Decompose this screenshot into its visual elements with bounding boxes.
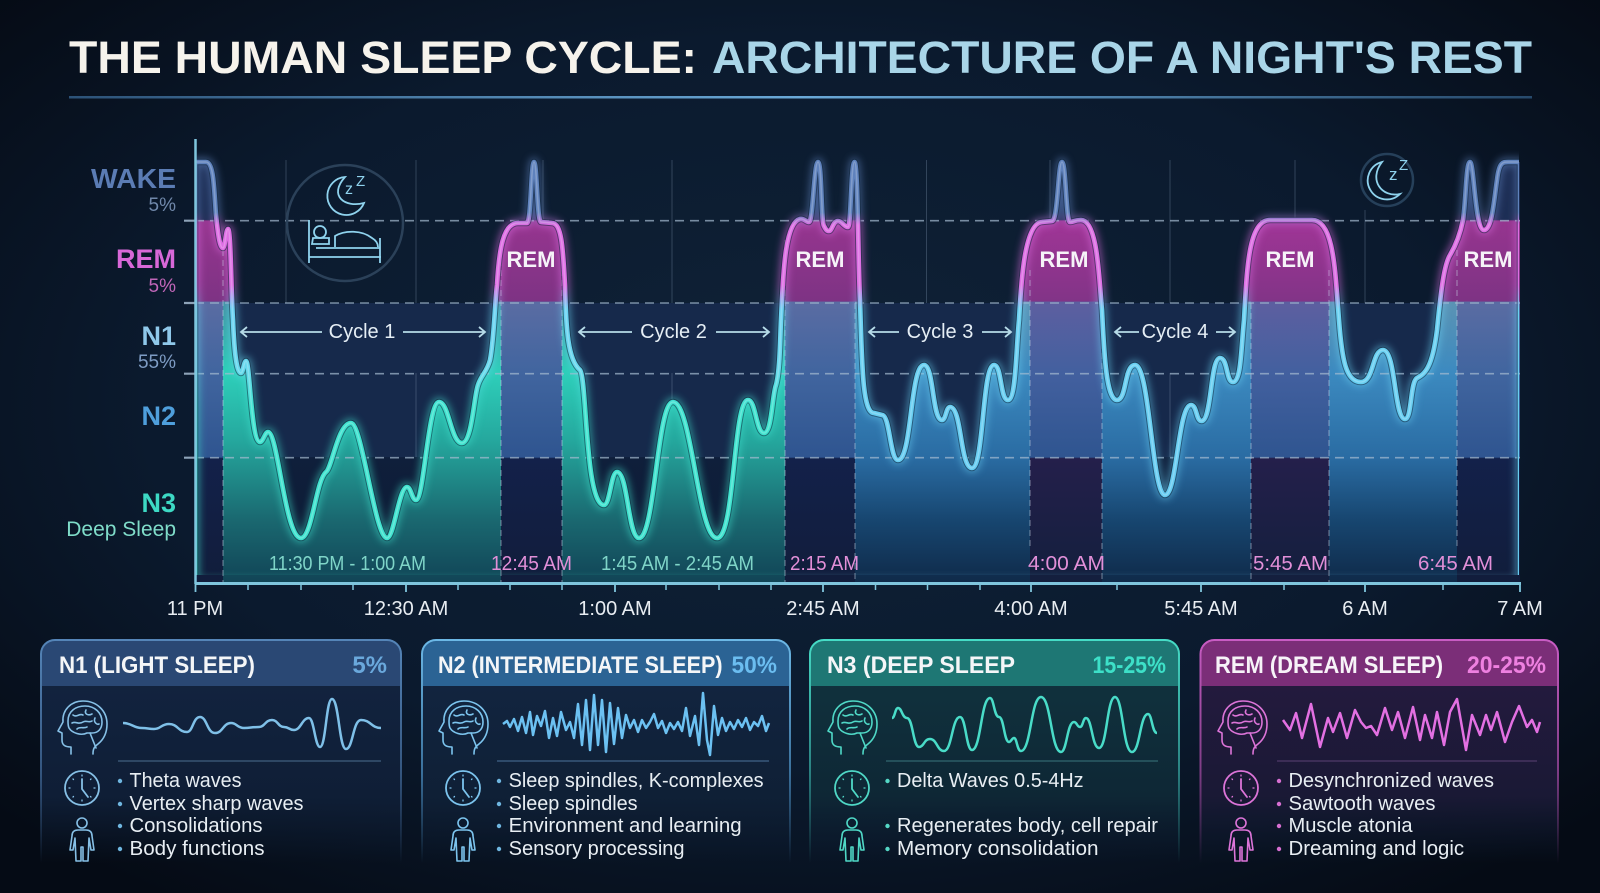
- REM labels inside chart: REM: [1266, 247, 1314, 272]
- panel: N1 light sleep: N1 (LIGHT SLEEP): [59, 652, 255, 679]
- icon: small moon: Z: [1399, 157, 1408, 174]
- title: [69, 32, 1532, 83]
- y-axis stage labels: WAKE: [91, 163, 176, 194]
- y-axis stage labels: REM: [116, 244, 176, 274]
- x-axis time labels: 5:45 AM: [1164, 598, 1238, 620]
- panel: N2 intermediate sleep: Environment and learning: [509, 815, 742, 837]
- cycle brackets: Cycle 2: [640, 321, 707, 343]
- cycle brackets: Cycle 3: [907, 321, 973, 343]
- panel: N2 intermediate sleep: N2 (INTERMEDIATE SLEEP): [438, 652, 722, 679]
- x-axis time labels: 6 AM: [1342, 598, 1388, 620]
- chart fill: under-curve sleep stage areas: [195, 150, 1520, 583]
- panel: N1 light sleep: Consolidations: [130, 815, 262, 837]
- panel: REM dream sleep: Dreaming and logic: [1288, 838, 1464, 860]
- icon: sleeping person with moon: [287, 165, 403, 281]
- x-axis time labels: [167, 598, 1543, 620]
- panel: N1 light sleep: Theta waves: [130, 770, 242, 792]
- panel: REM dream sleep: REM (DREAM SLEEP): [1215, 652, 1443, 679]
- panel: N2 intermediate sleep: [422, 640, 790, 863]
- panel: N3 deep sleep: Regenerates body, cell repair: [897, 815, 1158, 837]
- panel: REM dream sleep: Desynchronized waves: [1288, 770, 1494, 792]
- panel: N2 intermediate sleep: Sensory processing: [509, 838, 685, 860]
- icon: small moon: [1361, 154, 1413, 206]
- y-axis stage labels: N1: [141, 321, 176, 351]
- REM labels inside chart: [507, 247, 1512, 272]
- REM labels inside chart: REM: [1040, 247, 1088, 272]
- panel: N3 deep sleep: 15-25%: [1092, 652, 1166, 679]
- time range labels: [269, 553, 1493, 575]
- x-axis time labels: 7 AM: [1497, 598, 1543, 620]
- y-axis stage labels: N3: [141, 488, 176, 518]
- hypnogram curve: [195, 162, 1520, 583]
- time range labels: 1:45 AM - 2:45 AM: [601, 553, 754, 575]
- panel: N2 intermediate sleep: Sleep spindles, K-complexes: [509, 770, 764, 792]
- time range labels: 12:45 AM: [491, 553, 572, 575]
- y-axis stage labels: N2: [141, 401, 176, 431]
- y-axis stage labels: Deep Sleep: [66, 518, 176, 541]
- icon: small moon: z: [1389, 165, 1398, 184]
- REM labels inside chart: REM: [1464, 247, 1512, 272]
- sleep hypnogram chart: [184, 139, 1521, 592]
- panel: REM dream sleep: [1200, 640, 1558, 863]
- panel: N3 deep sleep: N3 (DEEP SLEEP: [827, 652, 1015, 679]
- panel: N2 intermediate sleep: Sleep spindles: [509, 793, 638, 815]
- panel: N1 light sleep: [41, 640, 401, 863]
- panel: REM dream sleep: Sawtooth waves: [1288, 793, 1436, 815]
- x-axis time labels: 12:30 AM: [364, 598, 448, 620]
- icon: sleeping person with moon: z: [345, 181, 353, 198]
- time range labels: 2:15 AM: [790, 553, 859, 575]
- icon: sleeping person with moon: Z: [356, 173, 365, 190]
- panel: N3 deep sleep: Memory consolidation: [897, 838, 1098, 860]
- time range labels: 4:00 AM: [1028, 553, 1105, 575]
- time range labels: 6:45 AM: [1418, 553, 1493, 575]
- x-axis time labels: 4:00 AM: [994, 598, 1068, 620]
- x-axis time labels: 2:45 AM: [786, 598, 860, 620]
- x-axis time labels: 1:00 AM: [578, 598, 652, 620]
- REM labels inside chart: REM: [507, 247, 555, 272]
- time range labels: 5:45 AM: [1253, 553, 1328, 575]
- axes: [195, 139, 1521, 592]
- title: THE HUMAN SLEEP CYCLE:: [69, 32, 697, 83]
- panel: N1 light sleep: 5%: [352, 652, 387, 679]
- y-axis stage labels: 5%: [149, 195, 176, 216]
- panel: N3 deep sleep: [810, 640, 1179, 863]
- panel: N3 deep sleep: Delta Waves 0.5-4Hz: [897, 770, 1084, 792]
- cycle brackets: Cycle 4: [1142, 321, 1208, 343]
- REM labels inside chart: REM: [796, 247, 844, 272]
- y-axis stage labels: 55%: [138, 352, 176, 373]
- cycle brackets: Cycle 1: [329, 321, 395, 343]
- panel: REM dream sleep: 20-25%: [1467, 652, 1546, 679]
- panel: N2 intermediate sleep: 50%: [732, 652, 777, 679]
- title: ARCHITECTURE OF A NIGHT'S REST: [712, 32, 1532, 83]
- panel: REM dream sleep: Muscle atonia: [1288, 815, 1413, 837]
- cycle brackets: [241, 321, 1235, 343]
- panel: N1 light sleep: Vertex sharp waves: [130, 793, 304, 815]
- x-axis time labels: 11 PM: [167, 598, 223, 620]
- y-axis stage labels: [66, 163, 176, 541]
- panel: N1 light sleep: Body functions: [130, 838, 264, 860]
- time range labels: 11:30 PM - 1:00 AM: [269, 553, 426, 575]
- y-axis stage labels: 5%: [149, 276, 176, 297]
